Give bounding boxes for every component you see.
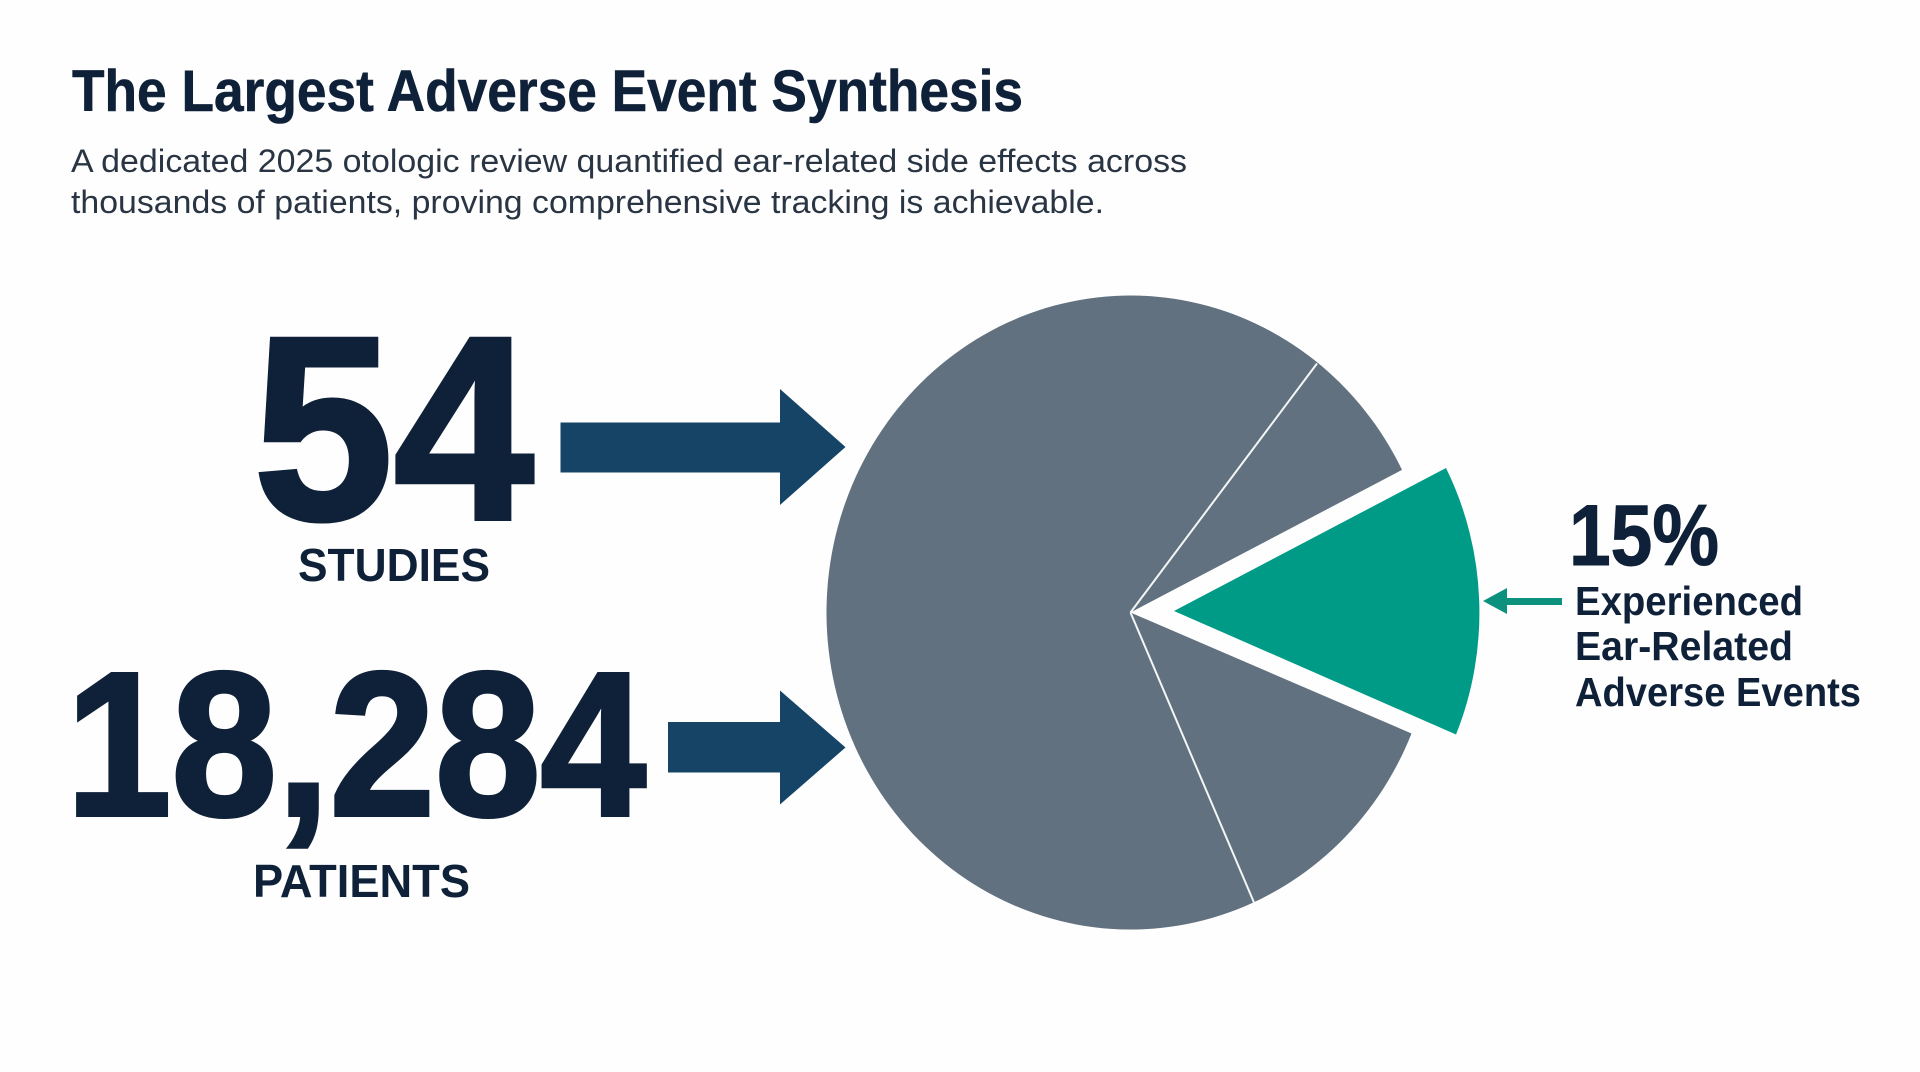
arrow: callout to green slice — [1483, 588, 1562, 614]
stat: 18,284 patients — [66, 630, 646, 907]
number: 15%: 15% — [1569, 488, 1719, 584]
callout description — [1575, 578, 1861, 715]
number: 54: 54 — [253, 282, 536, 575]
number: 18,284: 18,284 — [66, 630, 646, 859]
arrow: patients to pie — [668, 690, 846, 804]
title: The Largest Adverse Event Synthesis — [72, 59, 1023, 124]
stat: 54 studies — [253, 282, 536, 591]
callout description: Adverse Events — [1575, 669, 1861, 715]
subtitle text block: A dedicated 2025 otologic review quantified ear-related side effects across — [71, 143, 1187, 179]
subtitle text block: thousands of patients, proving comprehensive tracking is achievable. — [71, 184, 1104, 220]
callout: 15% experienced ear-related adverse events — [1569, 488, 1861, 715]
pie slice: 15% highlighted — [1174, 468, 1479, 734]
subtitle text block — [71, 143, 1187, 220]
callout description: Experienced — [1575, 578, 1803, 624]
label: studies: STUDIES — [298, 539, 490, 591]
label: patients: PATIENTS — [253, 855, 470, 907]
arrow: studies to pie — [560, 389, 846, 505]
pie slices: remaining patients — [827, 296, 1412, 930]
callout description: Ear-Related — [1575, 623, 1793, 669]
pie chart — [827, 296, 1479, 930]
